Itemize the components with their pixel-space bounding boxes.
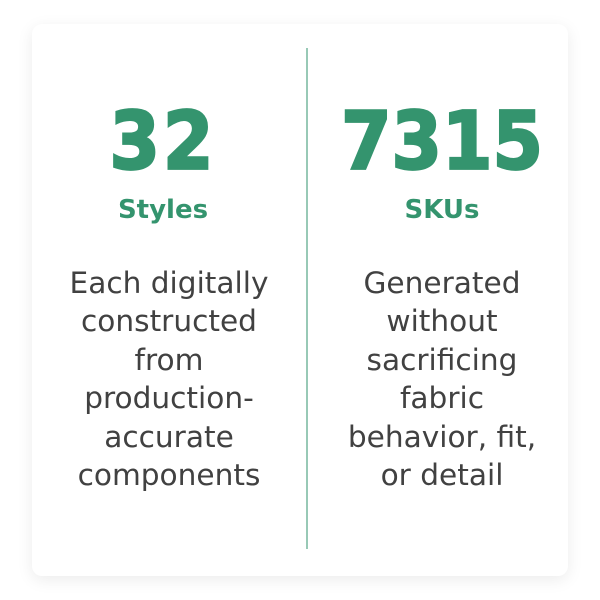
description: SKUs: without: [386, 304, 498, 338]
description: SKUs: behavior, fit,: [348, 420, 536, 454]
description: styles: accurate: [104, 420, 234, 454]
stat label: SKUs: SKUs: [404, 195, 480, 225]
description: styles: constructed: [81, 304, 257, 338]
description: SKUs: [348, 266, 536, 492]
stat number: 7315: 7315: [341, 96, 543, 188]
description: SKUs: sacrificing: [367, 343, 517, 377]
stat label: Styles: Styles: [118, 195, 208, 225]
description: SKUs: fabric: [400, 381, 484, 415]
description: styles: [70, 266, 268, 492]
description: styles: from: [135, 343, 203, 377]
description: styles: components: [78, 458, 260, 492]
description: styles: Each digitally: [70, 266, 268, 300]
divider line: [306, 48, 308, 549]
stat number: 32: 32: [110, 96, 216, 188]
description: styles: production-: [84, 381, 254, 415]
description: SKUs: or detail: [381, 458, 503, 492]
description: SKUs: Generated: [363, 266, 521, 300]
